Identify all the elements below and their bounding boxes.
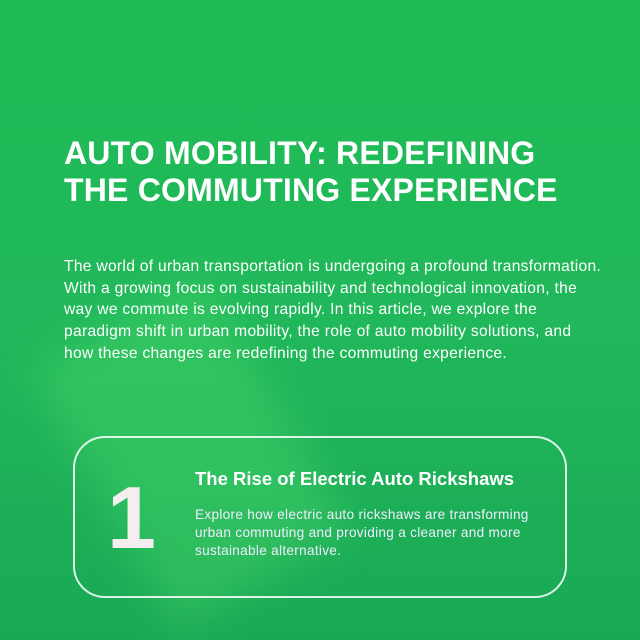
card text: sustainable alternative. (195, 543, 341, 558)
intro paragraph (64, 258, 601, 362)
intro paragraph: With a growing focus on sustainability and technological innovation, the (64, 280, 577, 297)
intro paragraph: how these changes are redefining the commuting experience. (64, 345, 507, 362)
intro paragraph: way we commute is evolving rapidly. In this article, we explore the (64, 301, 537, 318)
card 1 (73, 436, 567, 598)
title: AUTO MOBILITY: REDEFINING THE COMMUTING EXPERIENCE (64, 135, 558, 208)
card text: Explore how electric auto rickshaws are transforming (195, 507, 529, 522)
number 1: 1 (107, 468, 156, 567)
intro paragraph: paradigm shift in urban mobility, the role of auto mobility solutions, and (64, 323, 571, 340)
card heading: The Rise of Electric Auto Rickshaws (195, 468, 514, 489)
card text (195, 507, 529, 558)
card text: urban commuting and providing a cleaner and more (195, 525, 521, 540)
intro paragraph: The world of urban transportation is undergoing a profound transformation. (64, 258, 601, 275)
